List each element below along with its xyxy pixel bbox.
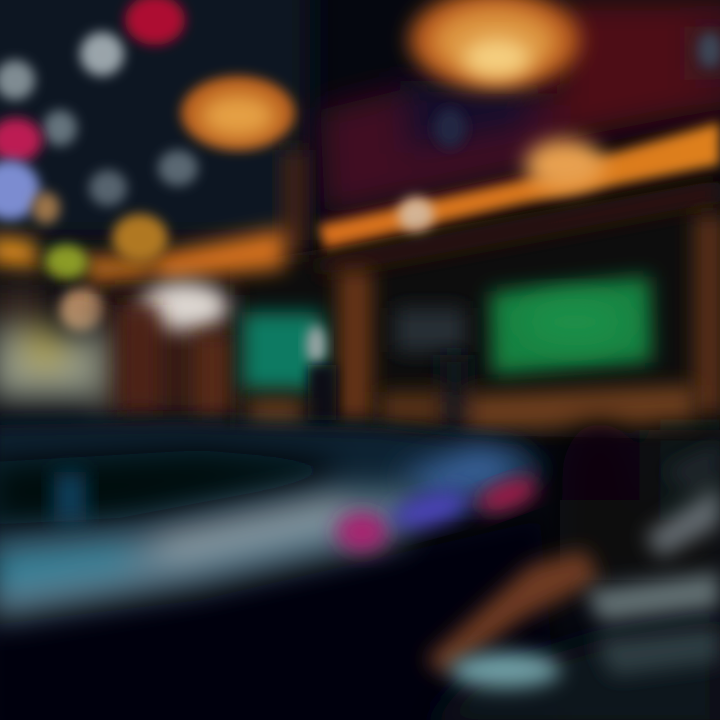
ceiling: dark navy <box>0 0 310 240</box>
foreground: brown arm <box>425 550 600 675</box>
wood trim below the strip <box>320 180 720 276</box>
left shelves: colourful bottles <box>0 285 235 420</box>
foreground: dark lower right <box>430 620 720 720</box>
bar counter: blue vertical <box>54 472 86 522</box>
silhouette: gray shoulder highlights <box>645 445 720 558</box>
green panel: small <box>242 312 336 420</box>
pillar: centre post above strip <box>282 150 306 255</box>
bar counter: black inset <box>0 450 340 525</box>
ceiling: white blurred spot lights <box>0 32 720 206</box>
left colored lights <box>0 118 168 332</box>
ceiling: red light <box>125 0 185 45</box>
wood columns <box>120 215 720 420</box>
orange light strip: right <box>318 122 720 250</box>
green panel: large <box>490 276 652 375</box>
bar counter: dark top <box>0 422 550 560</box>
ceiling: dark red drapes <box>320 0 720 215</box>
wall: dark backbar <box>230 180 720 440</box>
lamp: centre pendant <box>181 76 295 150</box>
lower wood ledge <box>248 355 695 430</box>
bar counter: blue edge right <box>400 445 530 500</box>
lamp: upper right pendant <box>409 0 581 90</box>
foreground: teal and gray objects <box>449 572 720 688</box>
bar counter: neon pink and purple edge <box>336 472 543 552</box>
bar counter: light reflective strip <box>0 490 420 620</box>
bottom: black lower area <box>0 520 560 720</box>
dim panel: gray glow <box>395 308 465 352</box>
orange light strip: left <box>0 228 285 285</box>
silhouette: person in foreground <box>560 423 720 580</box>
white lamp: centre left <box>140 282 228 330</box>
